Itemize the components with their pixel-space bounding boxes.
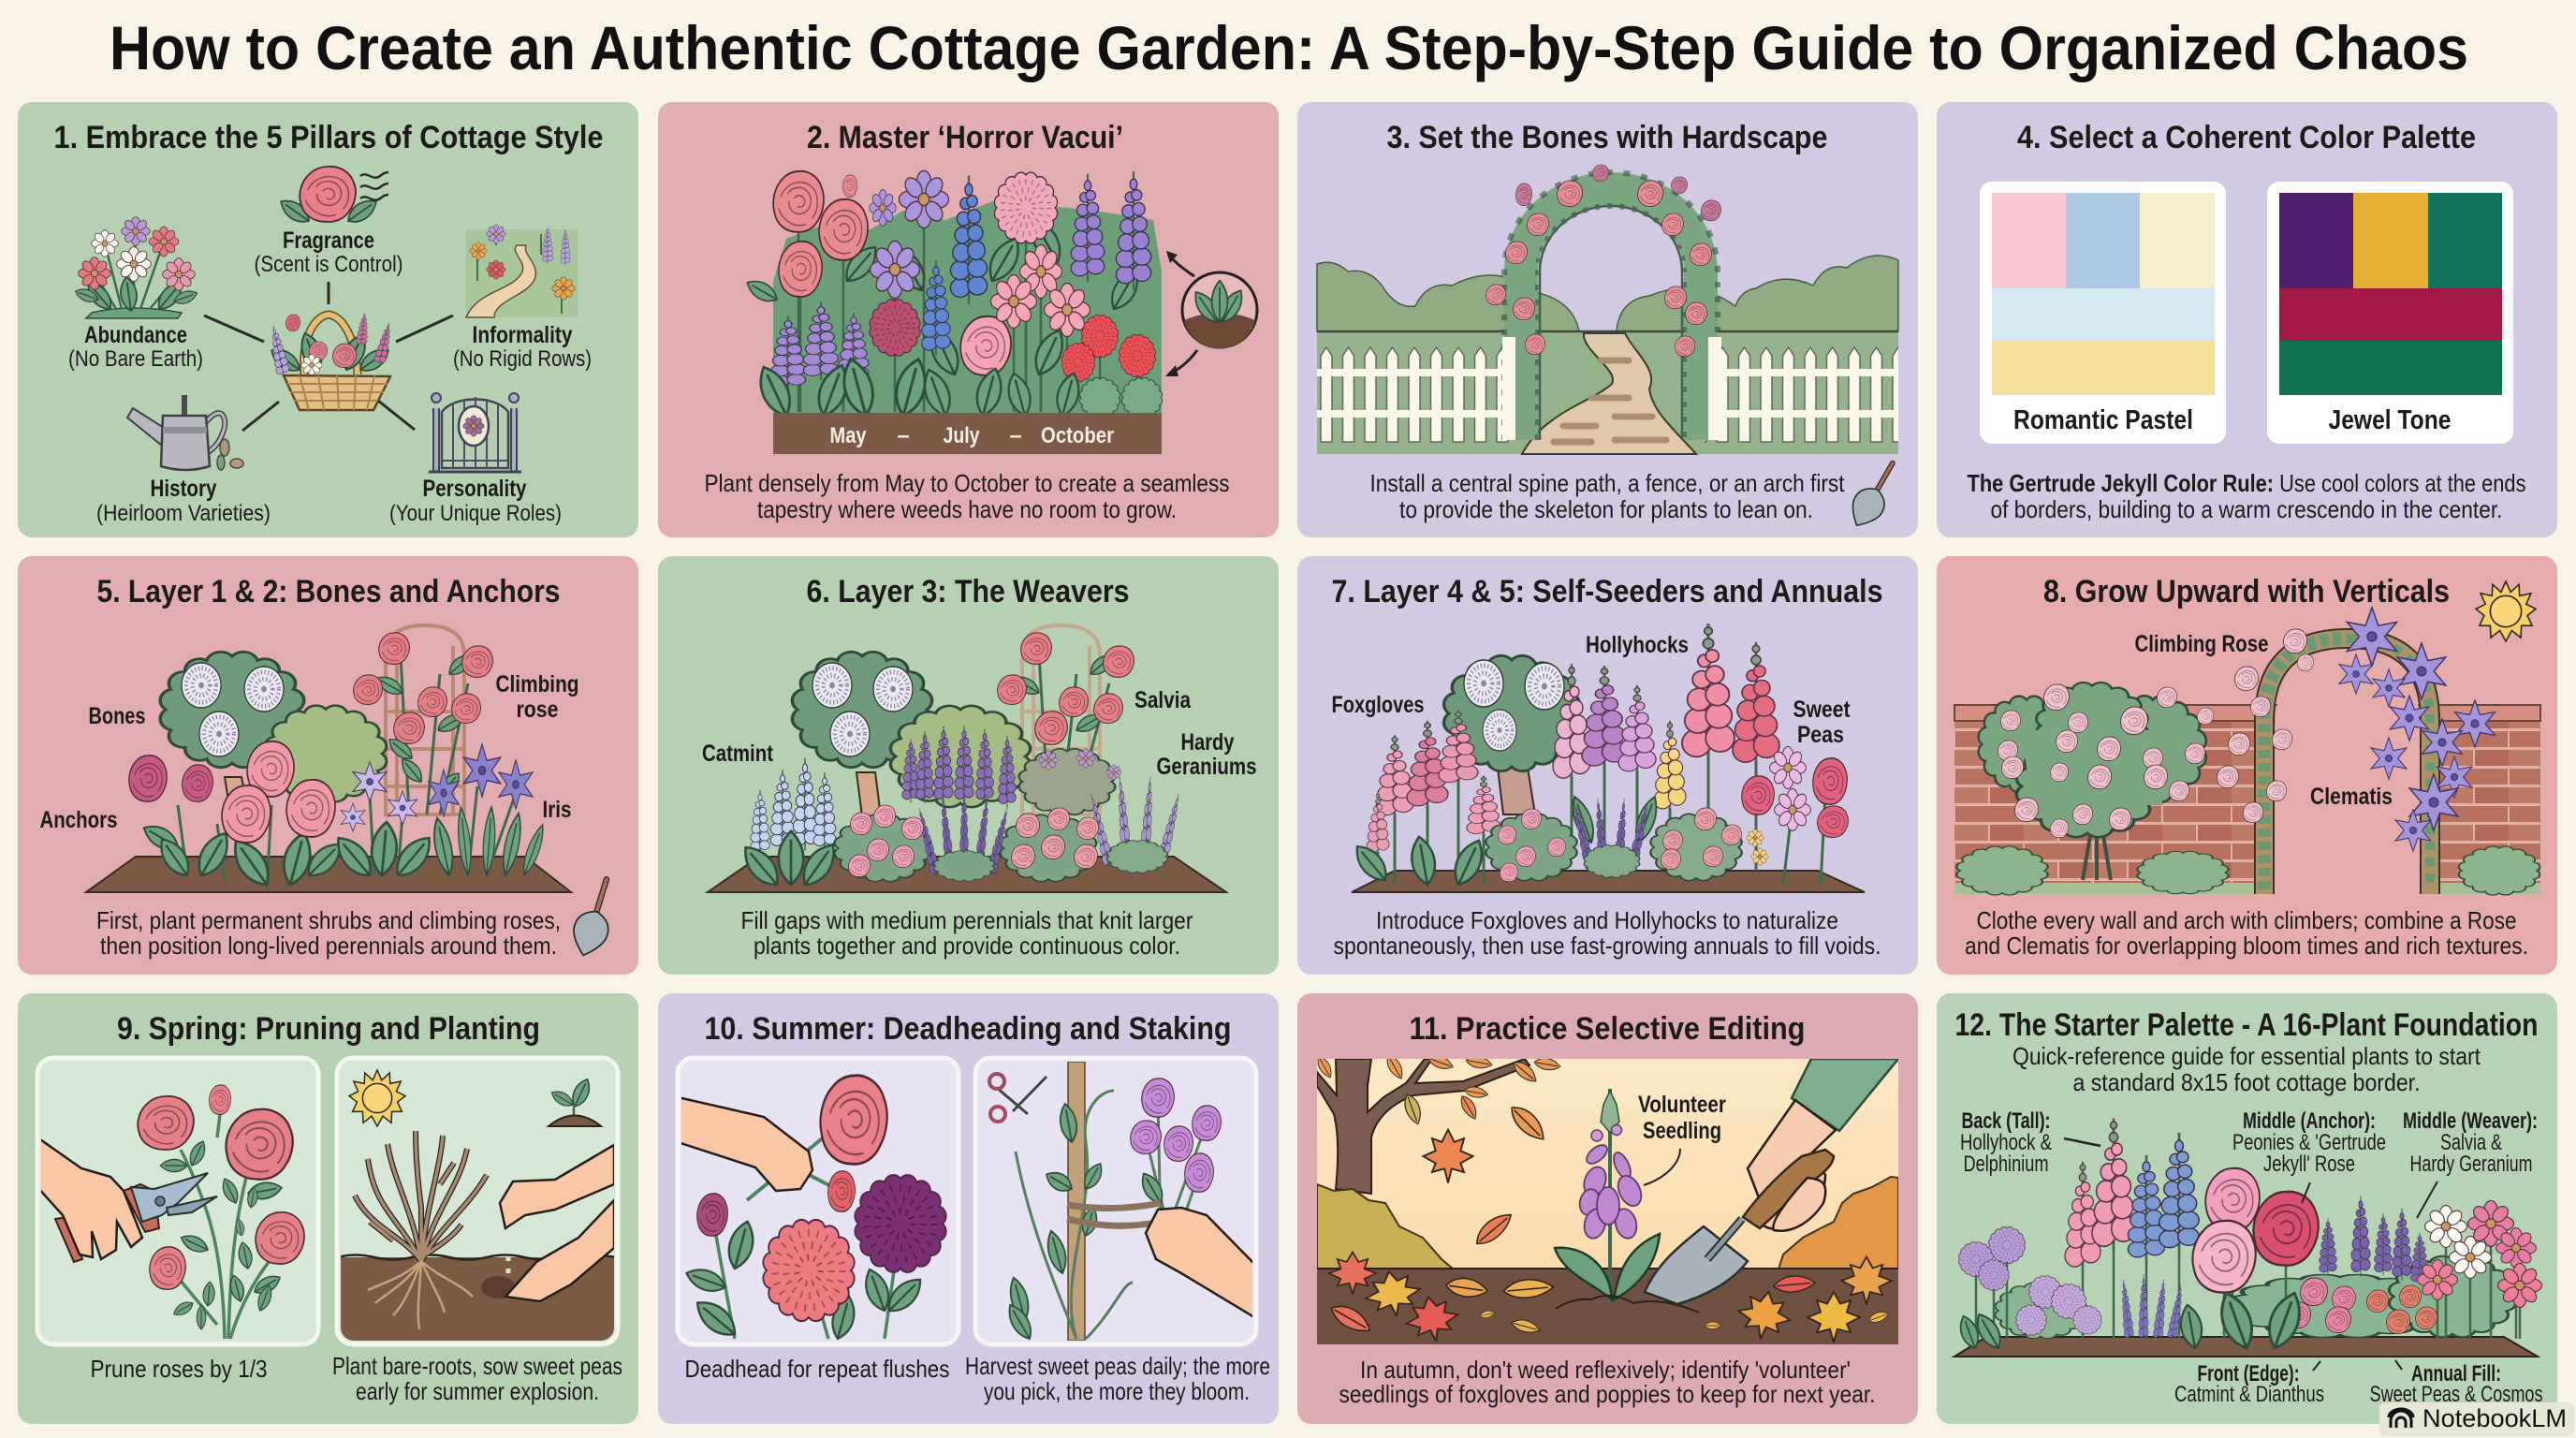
body text (741, 906, 1193, 960)
body text: In autumn, don't weed reflexively; identify 'volunteer' (1360, 1356, 1851, 1384)
panel background (1937, 993, 2557, 1424)
heading: 6. Layer 3: The Weavers (807, 574, 1129, 609)
labels: annual fill: Annual Fill: (2411, 1361, 2501, 1387)
icon: sun (2476, 581, 2536, 641)
panel background (18, 556, 638, 975)
panel: 7 self-seeders (1297, 556, 1918, 975)
body text (1968, 469, 2525, 523)
label: history: (Heirloom Varieties) (96, 501, 271, 526)
heading: 5. Layer 1 & 2: Bones and Anchors (97, 574, 560, 609)
icon: flower basket hub (267, 313, 395, 410)
labels: back tall: Hollyhock & (1960, 1130, 2052, 1155)
icon: abundance bouquet (74, 217, 198, 318)
panel: 12 starter palette (1937, 993, 2557, 1424)
body text: Introduce Foxgloves and Hollyhocks to naturalize (1376, 906, 1838, 934)
body text (1370, 469, 1845, 523)
panel: 4 colour palette (1937, 102, 2557, 537)
body text: First, plant permanent shrubs and climbing roses, (96, 906, 561, 934)
panel: 11 selective editing (1297, 993, 1918, 1424)
card captions: you pick, the more they bloom. (984, 1377, 1250, 1405)
labels: back tall (1960, 1108, 2100, 1177)
panel background (1937, 556, 2557, 975)
timeline soil band: May (829, 423, 867, 448)
body text: to provide the skeleton for plants to lean on. (1399, 495, 1813, 523)
body text (1339, 1356, 1876, 1408)
plant labels: rose (517, 697, 559, 723)
heading: 7. Layer 4 & 5: Self-Seeders and Annuals (1331, 574, 1883, 609)
label: abundance (68, 322, 203, 372)
card: romantic pastel (1980, 182, 2226, 444)
subtitle: a standard 8x15 foot cottage border. (2072, 1068, 2421, 1096)
heading: 9. Spring: Pruning and Planting (117, 1011, 540, 1047)
timeline soil band: – (1009, 423, 1022, 448)
heading: 3. Set the Bones with Hardscape (1387, 120, 1827, 155)
icon: trowel (567, 874, 622, 961)
labels: middle anchor: Peonies & 'Gertrude (2232, 1130, 2386, 1155)
card captions: Harvest sweet peas daily; the more (965, 1352, 1270, 1380)
body text: Fill gaps with medium perennials that knit larger (741, 906, 1193, 934)
timeline soil band (773, 413, 1162, 454)
plant labels (1331, 632, 1851, 748)
labels: front edge (2174, 1361, 2324, 1407)
label: abundance: (No Bare Earth) (68, 346, 203, 372)
labels: middle anchor: Jekyll' Rose (2263, 1152, 2355, 1177)
card: romantic pastel: Romantic Pastel (2013, 405, 2193, 435)
plant labels: Sweet (1793, 697, 1851, 723)
card: deadheading (678, 1058, 959, 1344)
panel background (1297, 556, 1918, 975)
label: history (96, 476, 271, 526)
panel background (658, 102, 1279, 537)
labels: annual fill (2370, 1360, 2542, 1407)
panel background (1297, 993, 1918, 1424)
watermark: NotebookLM: NotebookLM (2422, 1404, 2567, 1432)
heading: 2. Master ‘Horror Vacui’ (807, 120, 1123, 155)
card captions (90, 1352, 622, 1405)
heading: 11. Practice Selective Editing (1410, 1011, 1805, 1047)
panel background (658, 556, 1279, 975)
subtitle: Quick-reference guide for essential plants to start (2012, 1042, 2481, 1070)
body text: then position long-lived perennials around them. (100, 932, 557, 960)
callout: volunteer seedling: Seedling (1643, 1118, 1721, 1144)
plant labels: Climbing Rose (2134, 631, 2269, 657)
panel background (1937, 102, 2557, 537)
labels: middle weaver: Hardy Geranium (2409, 1152, 2533, 1177)
plant labels: Iris (543, 797, 571, 823)
card: pruning roses (37, 1058, 318, 1344)
label: personality (389, 476, 562, 526)
body text: seedlings of foxgloves and poppies to keep for next year. (1339, 1380, 1876, 1408)
panel: 6 weavers (658, 556, 1279, 975)
body text: plants together and provide continuous color. (754, 932, 1180, 960)
card: staking sweet peas (975, 1058, 1256, 1344)
plant labels: Geraniums (1157, 754, 1256, 780)
icon: winding path vignette (466, 225, 578, 317)
dense planting illustration (743, 170, 1163, 421)
label: fragrance: (Scent is Control) (255, 252, 402, 277)
plant labels (2134, 631, 2393, 810)
panel: 8 verticals (1937, 556, 2557, 975)
body text (1333, 906, 1881, 960)
panel: 10 summer (658, 993, 1279, 1424)
connector lines (204, 282, 453, 431)
icon: fragrant rose (276, 167, 388, 227)
callout: volunteer seedling: Volunteer (1638, 1092, 1726, 1118)
panel background (18, 993, 638, 1424)
plant labels: Catmint (702, 741, 774, 767)
body text (96, 906, 561, 960)
panel background (1297, 102, 1918, 537)
body text: spontaneously, then use fast-growing annuals to fill voids. (1333, 932, 1881, 960)
labels: middle anchor: Middle (Anchor): (2243, 1108, 2376, 1134)
plant labels (39, 671, 578, 833)
arch and fence scene (1317, 165, 1898, 454)
body text: Install a central spine path, a fence, or an arch first (1370, 469, 1845, 497)
card: jewel tone (2267, 182, 2513, 444)
body text: Plant densely from May to October to create a seamless (704, 469, 1230, 497)
autumn scene (1314, 1052, 1898, 1345)
labels: back tall: Delphinium (1964, 1152, 2048, 1177)
garden bed illustration (708, 625, 1226, 892)
panel background (18, 102, 638, 537)
card captions: Prune roses by 1/3 (90, 1355, 268, 1383)
panel background (658, 993, 1279, 1424)
heading: 10. Summer: Deadheading and Staking (704, 1011, 1232, 1047)
panel: 2 horror vacui (658, 102, 1279, 537)
label: fragrance (255, 227, 402, 277)
plant labels: Hardy (1181, 729, 1235, 756)
subtitle (2012, 1042, 2481, 1096)
panel: 3 hardscape (1297, 102, 1918, 537)
wall and arch illustration (1954, 608, 2540, 895)
icon: personal gate (429, 393, 521, 472)
labels: front edge: Front (Edge): (2198, 1361, 2299, 1387)
plant labels: Foxgloves (1331, 692, 1425, 718)
labels: back tall: Back (Tall): (1962, 1108, 2050, 1134)
heading: 1. Embrace the 5 Pillars of Cottage Style (54, 120, 603, 155)
body text: of borders, building to a warm crescendo in the center. (1990, 495, 2503, 523)
timeline soil band: July (944, 423, 980, 448)
body text (704, 469, 1230, 523)
timeline soil band: – (897, 423, 910, 448)
panel: 5 bones and anchors (18, 556, 638, 975)
label: informality: Informality (472, 322, 573, 348)
plant labels: Peas (1797, 722, 1844, 748)
garden bed illustration (1350, 624, 1865, 892)
plant labels: Bones (88, 703, 146, 729)
plant labels: Anchors (39, 807, 118, 833)
plant labels: Climbing (496, 671, 578, 697)
icon: watering can (127, 395, 243, 470)
card captions (685, 1352, 1270, 1405)
card: jewel tone: Jewel Tone (2329, 405, 2451, 435)
heading: 8. Grow Upward with Verticals (2043, 574, 2450, 609)
label: fragrance: Fragrance (283, 227, 374, 254)
panel: 9 spring (18, 993, 638, 1424)
card captions: Plant bare-roots, sow sweet peas (332, 1352, 622, 1380)
labels: middle weaver (2403, 1108, 2538, 1218)
plant labels: Salvia (1134, 687, 1192, 713)
label: personality: (Your Unique Roles) (389, 501, 562, 526)
border planting illustration (1954, 1118, 2541, 1357)
callout: volunteer seedling (1638, 1092, 1726, 1185)
watermark: NotebookLM (2379, 1402, 2574, 1436)
icon: weed circle with arrows (1165, 251, 1257, 376)
body text: The Gertrude Jekyll Color Rule: Use cool colors at the ends (1968, 469, 2525, 497)
garden bed illustration (86, 625, 571, 892)
labels: middle anchor (2232, 1108, 2386, 1203)
plant labels (702, 687, 1256, 780)
label: personality: Personality (423, 476, 527, 502)
icon: trowel (1843, 455, 1906, 533)
body text: tapestry where weeds have no room to grow. (757, 495, 1177, 523)
card captions: early for summer explosion. (356, 1377, 599, 1405)
panel: 1 five pillars (18, 102, 638, 537)
label: abundance: Abundance (84, 322, 187, 348)
plant labels: Hollyhocks (1586, 632, 1689, 658)
plant labels: Clematis (2310, 784, 2393, 810)
label: informality (453, 322, 592, 372)
labels: middle weaver: Salvia & (2440, 1130, 2502, 1155)
card: planting bare roots (337, 1058, 618, 1344)
label: history: History (150, 476, 217, 502)
body text (1965, 906, 2528, 960)
timeline soil band: October (1041, 423, 1114, 448)
label: informality: (No Rigid Rows) (453, 346, 592, 372)
card captions: Deadhead for repeat flushes (685, 1355, 949, 1383)
labels: front edge: Catmint & Dianthus (2174, 1382, 2324, 1407)
heading: 4. Select a Coherent Color Palette (2017, 120, 2476, 155)
